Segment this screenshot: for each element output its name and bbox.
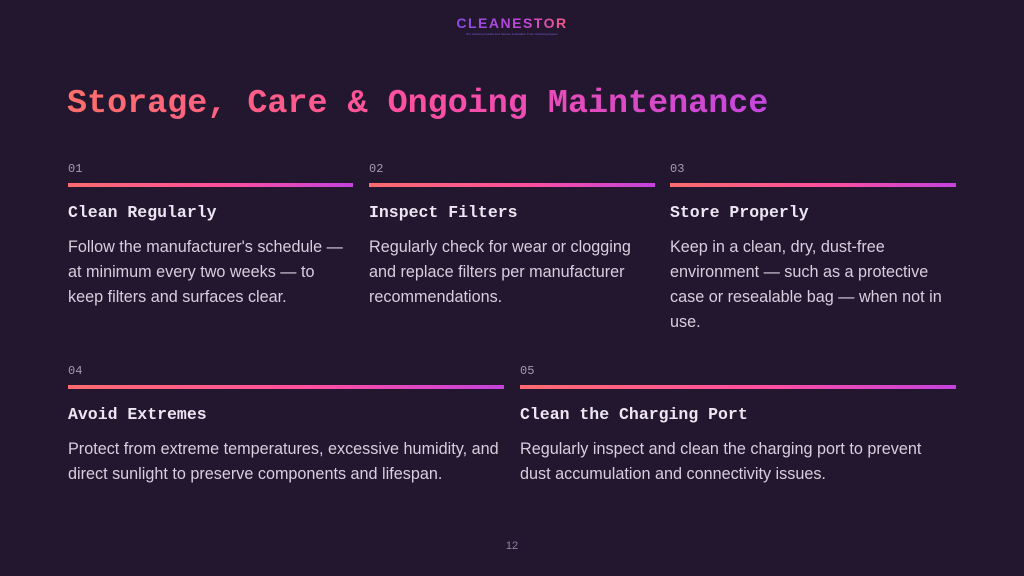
- card 05: [520, 364, 956, 483]
- card 03: use.: [670, 313, 701, 331]
- card 03: 03: [670, 162, 684, 176]
- card 03: Store Properly: [670, 203, 809, 222]
- card 04: Avoid Extremes: [68, 405, 207, 424]
- card 01: 01: [68, 162, 82, 176]
- card 01: keep filters and surfaces clear.: [68, 288, 287, 306]
- card 05: Regularly inspect and clean the charging port to prevent: [520, 440, 921, 458]
- card 03: case or resealable bag — when not in: [670, 288, 942, 306]
- card 02: Regularly check for wear or clogging: [369, 238, 631, 256]
- card 02: recommendations.: [369, 288, 502, 306]
- card 02: 02: [369, 162, 383, 176]
- card 04: [68, 364, 504, 483]
- card 04: direct sunlight to preserve components and lifespan.: [68, 465, 442, 483]
- logo: CLEANESTOR: [456, 15, 568, 31]
- card 03: environment — such as a protective: [670, 263, 928, 281]
- title: Storage, Care & Ongoing Maintenance: [67, 85, 768, 123]
- card 01: [68, 162, 353, 306]
- card 01: Follow the manufacturer's schedule —: [68, 238, 343, 256]
- card 05: Clean the Charging Port: [520, 405, 748, 424]
- card 02: [369, 162, 655, 306]
- card 02: and replace filters per manufacturer: [369, 263, 625, 281]
- card 04: 04: [68, 364, 82, 378]
- card 02: Inspect Filters: [369, 203, 518, 222]
- logo: Pro Cleaning Guides And Service Journalism From Cleaning Experts: [466, 32, 558, 36]
- card 04: Protect from extreme temperatures, excessive humidity, and: [68, 440, 499, 458]
- card 01: Clean Regularly: [68, 203, 217, 222]
- card 05: dust accumulation and connectivity issues.: [520, 465, 826, 483]
- card 03: Keep in a clean, dry, dust-free: [670, 238, 885, 256]
- card 03: [670, 162, 956, 331]
- card 01: at minimum every two weeks — to: [68, 263, 314, 281]
- card 05: 05: [520, 364, 534, 378]
- page number: 12: [506, 540, 518, 552]
